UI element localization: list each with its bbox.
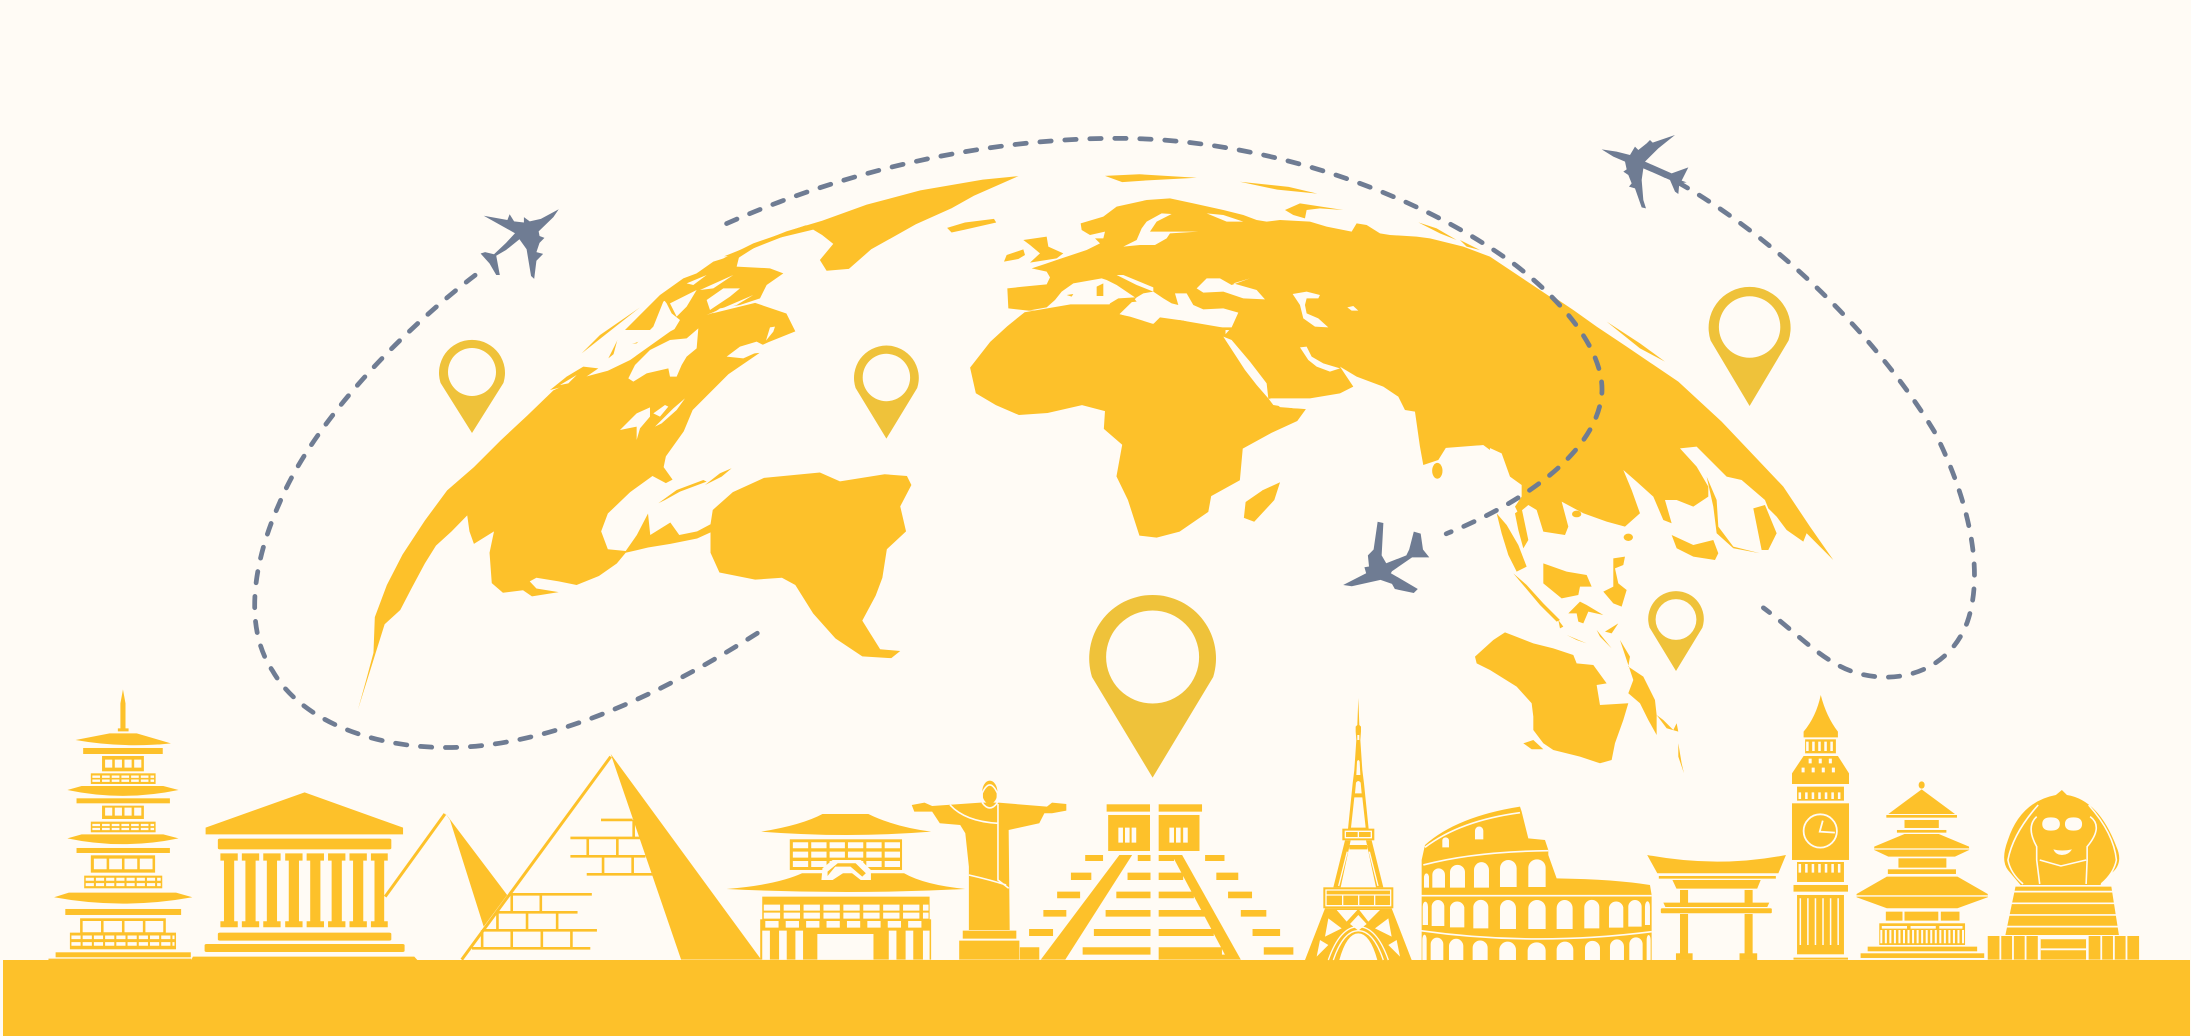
Gulf of St Lawrence: [727, 327, 775, 358]
icon: airplane top right: [1602, 135, 1688, 208]
Hudson Bay: [628, 328, 698, 382]
Ireland: [1004, 249, 1025, 262]
Caribbean islands: [658, 468, 732, 503]
Philippines: [1603, 557, 1627, 607]
Franz Josef islands: [1240, 182, 1317, 194]
ground band: [3, 960, 2190, 1036]
Persian Gulf: [1300, 347, 1340, 372]
Africa: [970, 304, 1306, 538]
icon: airplane top left: [481, 209, 559, 279]
Eurasia east: [1440, 297, 1833, 560]
Svalbard: [1105, 174, 1197, 182]
Aral Sea: [1347, 306, 1358, 311]
brick courses: [472, 820, 653, 948]
landmark: torii gate: [1647, 855, 1786, 960]
Great Lakes: [620, 398, 685, 440]
Arctic mainland fringe: [608, 295, 673, 358]
icon: airplane centre: [1343, 522, 1429, 593]
Mediterranean Sea: [1028, 278, 1238, 327]
northern arctic strip: [697, 225, 807, 273]
flight route: right arc: [1656, 170, 1974, 677]
world map: Europe and western Asia: [1004, 198, 1555, 465]
landmark: pyramids: [385, 754, 761, 960]
second platform: [1342, 829, 1374, 840]
Sakhalin: [1607, 322, 1665, 362]
landmark: Mayan pyramid: [1020, 804, 1293, 960]
icon: location pin over Atlantic: [854, 346, 919, 439]
landmark: Greek temple: [191, 792, 417, 960]
world map: South-East Asia and Oceania: [1475, 508, 1684, 773]
Taiwan: [1624, 534, 1633, 541]
New Siberian islands: [1418, 222, 1480, 250]
icon: location pin right: [1709, 287, 1791, 406]
Sulawesi: [1568, 602, 1603, 623]
Japan arc: [1672, 535, 1718, 560]
first platform: [1323, 887, 1393, 908]
icon: location pin small: [1648, 591, 1704, 671]
landmark: Big Ben: [1792, 695, 1849, 960]
Adriatic Sea: [1117, 275, 1153, 292]
icon: location pin large centre: [1089, 595, 1216, 778]
New Guinea: [1620, 640, 1678, 735]
Arctic channels: [560, 275, 753, 385]
landmark: Asian palace: [727, 814, 965, 960]
landmark: Eiffel Tower: [1305, 698, 1412, 960]
Eurasia west: [1007, 198, 1555, 465]
Baffin region: [660, 253, 783, 337]
Novaya Zemlya: [1285, 203, 1343, 218]
icon: location pin over North Pacific: [439, 340, 505, 433]
Hainan: [1572, 511, 1581, 517]
world map: Canada and Arctic detail: [550, 225, 807, 503]
Tasmania: [1523, 740, 1543, 749]
world map: Africa and Indian Ocean: [970, 174, 1442, 538]
Great Britain: [1023, 237, 1063, 263]
flight route: upper arc: [727, 138, 1602, 534]
landmark: Christ the Redeemer: [912, 781, 1066, 960]
spire and upper section: [1348, 698, 1369, 829]
lattice base: [1305, 908, 1412, 960]
Malay peninsula: [1515, 508, 1528, 548]
Australia: [1475, 632, 1628, 763]
Arctic islands west: [550, 367, 598, 390]
White Sea: [1207, 213, 1243, 222]
Java: [1513, 573, 1587, 643]
landmark: Sphinx: [1988, 790, 2139, 960]
small islands: [1597, 623, 1684, 773]
Borneo: [1543, 563, 1592, 598]
South America: [711, 472, 911, 658]
Red Sea and Gulf of Aden: [1223, 337, 1307, 408]
world map: Americas: [358, 176, 1019, 710]
landmark: Colosseum: [1421, 807, 1652, 960]
Baltic Sea: [1123, 213, 1198, 247]
Sumatra: [1497, 513, 1527, 572]
Iceland: [947, 219, 996, 232]
middle legs: [1333, 840, 1383, 887]
small pyramid: [385, 814, 445, 897]
Greenland: [724, 176, 1019, 271]
Black Sea: [1197, 278, 1265, 299]
Kamchatka peninsula: [1753, 505, 1777, 550]
Sri Lanka: [1432, 463, 1442, 479]
Madagascar: [1244, 482, 1280, 522]
landmark: tiered temple: [1857, 781, 1988, 958]
Sardinia and Sicily: [1067, 283, 1137, 303]
Caspian Sea: [1293, 292, 1328, 327]
flight route: left loop: [255, 275, 769, 748]
North America: [358, 303, 795, 710]
thin coast: [1707, 477, 1760, 553]
world map: East Asia: [1440, 297, 1833, 560]
large pyramid: [462, 757, 611, 960]
landmark: Japanese pagoda: [48, 689, 192, 960]
